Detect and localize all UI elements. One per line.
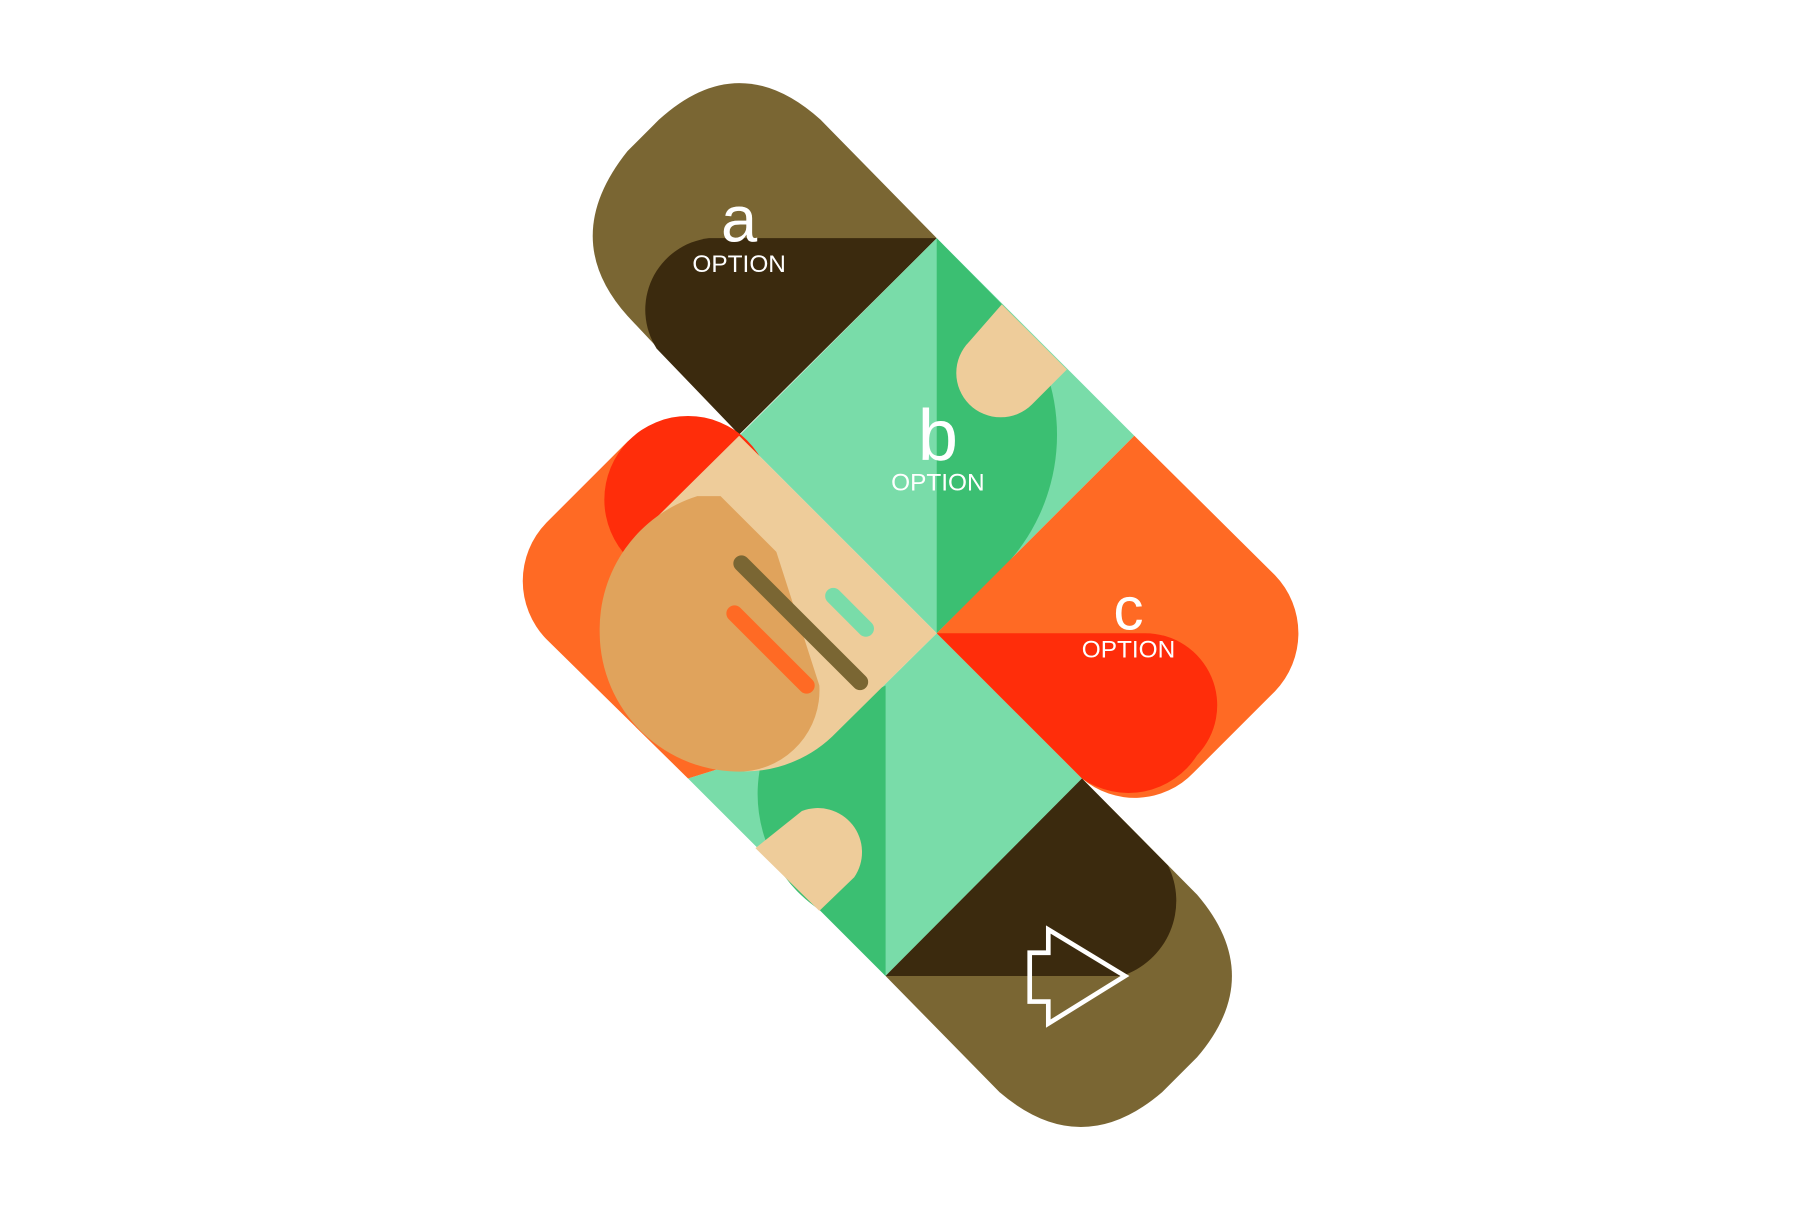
icon: arrow	[1030, 930, 1125, 1024]
panel: lower green diamond	[688, 633, 1082, 976]
label: option a: OPTION	[692, 251, 786, 278]
label: option b	[891, 396, 985, 496]
label: option c: OPTION	[1082, 637, 1175, 664]
panel: option b green diamond	[739, 238, 1134, 633]
label: option b: OPTION	[891, 469, 985, 496]
label: option b: b	[918, 396, 958, 476]
panel: left orange pill with hand	[523, 416, 937, 778]
label: option a: a	[721, 183, 758, 256]
panel: bottom brown pill	[886, 778, 1232, 1127]
panel: option a brown pill	[593, 83, 937, 435]
label: option c	[1082, 575, 1175, 664]
label: option c: c	[1113, 575, 1144, 643]
panel: option c orange pill	[937, 436, 1298, 798]
label: option a	[692, 183, 786, 278]
